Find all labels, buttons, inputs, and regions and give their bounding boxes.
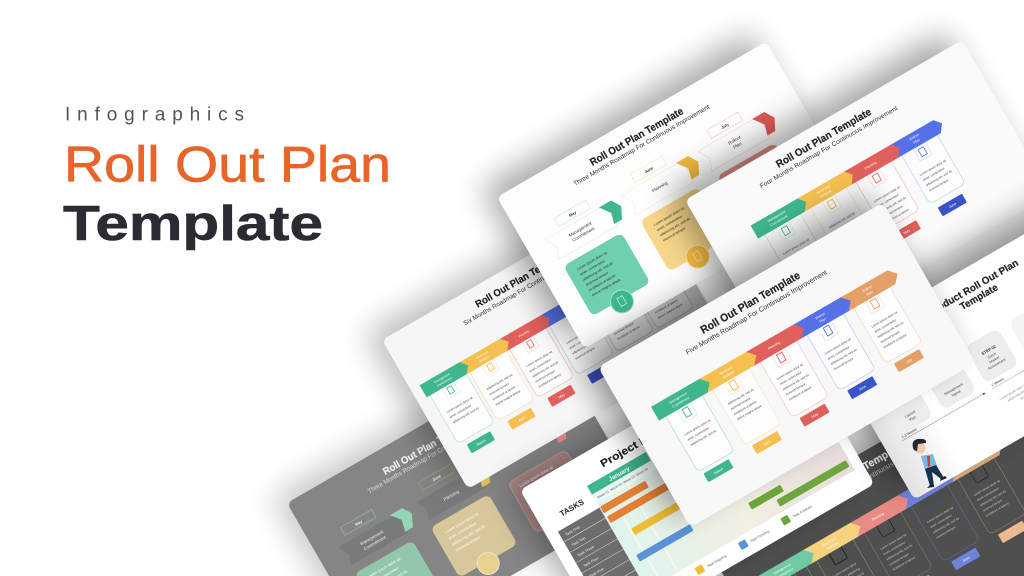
column: May: eiusmod tempor: [534, 369, 556, 384]
column: April: dolore magna aliqua: [495, 389, 521, 407]
column: May: [538, 186, 668, 329]
column: July: July: [720, 121, 730, 130]
column: June: [899, 130, 974, 219]
column: May dark: [861, 506, 940, 576]
header band: five-month slide: Plan: [819, 317, 827, 324]
header band: six-month slide: Planning: [518, 329, 530, 338]
subheading: six-month slide: Six Months Roadmap For Continuous Improvement: [462, 249, 591, 327]
column: April: April: [518, 416, 526, 423]
header band: five-month slide: Planning: [767, 341, 781, 351]
column: June dark: eiusmod tempor: [935, 525, 957, 540]
heading: four-month slide: Roll Out Plan Template: [774, 106, 874, 171]
header band: five-month slide: Analysis: [722, 370, 735, 380]
header band: four-month slide: Rollout: [909, 133, 920, 141]
column: June: Planning: [651, 180, 669, 193]
column: July: [691, 98, 815, 229]
panel: dark three-month slide: [287, 348, 643, 576]
column: June: adipiscing elit, sed do: [571, 337, 599, 355]
column: May: amet, consectetur: [876, 193, 899, 209]
column: June: eiusmod tempor: [833, 357, 854, 371]
column: July: Lorem ipsum dolor sit: [871, 310, 898, 329]
heading: five-month slide: Roll Out Plan Template: [699, 270, 802, 337]
legend: [694, 502, 813, 575]
subheading: three-month slide: Three Months Roadmap For Continuous Improvement: [572, 104, 711, 188]
column: May: Commitment: [363, 534, 387, 551]
column: March dark: [766, 561, 838, 576]
column: June: amet, consectetur: [827, 345, 850, 361]
column: May: incididunt ut labore: [885, 208, 910, 224]
column: May dark: Lorem ipsum dolor sit: [880, 533, 907, 551]
column: May: amet, consectetur: [779, 370, 802, 386]
column: May: May: [811, 412, 819, 419]
header band: five-month slide: Rollout: [815, 312, 826, 320]
column: April: incididunt ut labore: [733, 400, 758, 416]
column: July: [586, 277, 654, 352]
column: June: amet, consectetur: [447, 520, 478, 541]
column: July: incididunt ut labore: [616, 324, 641, 341]
column: April: dolore magna aliqua: [736, 404, 762, 421]
column: July: adipiscing elit, sed do: [877, 321, 904, 339]
column: May: Commitment: [571, 226, 596, 243]
column: April: eiusmod tempor: [730, 396, 751, 411]
column: June: eiusmod tempor: [574, 346, 596, 361]
column: April: adipiscing elit, sed do: [727, 387, 755, 406]
column: June: June: [858, 384, 867, 392]
column: July dark: adipiscing elit, sed do: [979, 489, 1007, 507]
subheading: five-month slide: Five Months Roadmap For Continuous Improvement: [685, 269, 829, 356]
column: June: Lorem ipsum dolor sit: [824, 337, 852, 356]
heading: dark three-month slide: Roll Out Plan Template: [381, 416, 477, 478]
heading: project roadmap: Project Roadmap: [598, 410, 691, 470]
timeline: 2 Weeks: [991, 377, 1005, 387]
column: May dark: incididunt ut labore: [892, 555, 916, 572]
header band: six-month slide: Commitment: [436, 376, 453, 388]
column: June: June: [643, 165, 655, 174]
column: June: [547, 300, 622, 388]
column: April: incididunt ut labore: [834, 223, 859, 240]
title: Roll Out Plan: Roll Out Plan: [64, 136, 391, 192]
timeline: 2-3 Weeks: [901, 427, 918, 439]
column: July dark: eiusmod tempor: [982, 498, 1003, 513]
column: April: adipiscing elit, sed do: [486, 373, 514, 391]
column: March: March: [713, 467, 724, 475]
column: March: Lorem ipsum dolor sit: [782, 238, 810, 256]
column: May: amet, consectetur: [528, 357, 552, 373]
task list panel: Task One: [565, 525, 581, 537]
heading: three-month slide: Roll Out Plan Template: [588, 105, 686, 169]
header band: dark five-month slide: [755, 438, 1006, 576]
header band: six-month slide: [420, 289, 593, 397]
column: April: April: [763, 439, 771, 447]
column: June: eiusmod tempor: [662, 226, 687, 243]
column: July: Lorem ipsum dolor sit: [518, 464, 555, 488]
column: July dark: amet, consectetur: [976, 486, 999, 502]
column: May: May: [558, 393, 566, 400]
step tiles: STEP 02: [980, 343, 997, 356]
legend: Task Finished: [792, 505, 813, 519]
gantt bars: [600, 389, 849, 576]
column: March: amet, consectetur: [449, 403, 472, 419]
column: June: Lorem ipsum dolor sit: [653, 206, 685, 227]
column: May: May: [354, 518, 364, 527]
heading: product roll out: Product Roll Out Plan: [927, 258, 1021, 318]
panel: three-month slide: [497, 42, 854, 349]
column: June: eiusmod tempor: [454, 534, 482, 553]
column: July: eiusmod tempor: [880, 330, 901, 344]
column: May: dolore magna aliqua: [591, 278, 621, 297]
column: March: Lorem ipsum dolor sit: [684, 418, 711, 437]
header band: six-month slide: Analysis: [478, 354, 490, 363]
column: March: March: [476, 438, 486, 447]
column: June dark: June: [962, 556, 970, 563]
panel: dark five-month slide: [705, 343, 1024, 576]
step tiles: Plan: [909, 415, 917, 422]
column: May: Management: [568, 220, 593, 238]
column: June dark: [908, 479, 986, 574]
column: June: adipiscing elit, sed do: [925, 169, 953, 187]
column: August: incididunt ut labore: [654, 298, 679, 315]
subheading: dark five-month slide: Five Months Roadmap For Continuous Improvement: [788, 440, 932, 527]
column: August: [626, 254, 694, 329]
column: May dark: eiusmod tempor: [889, 552, 910, 567]
timeline: [899, 346, 1024, 442]
column: April: adipiscing elit, sed do: [828, 211, 856, 229]
header band: four-month slide: Planning: [864, 160, 877, 171]
header band: dark five-month slide: Analysis: [826, 541, 839, 551]
column: April: eiusmod tempor: [489, 382, 510, 396]
column: August: eiusmod tempor: [651, 295, 672, 309]
step tiles: Market: [989, 355, 1000, 364]
column: March: adipiscing elit, sed do: [690, 429, 717, 447]
week labels: Week 01: [596, 489, 610, 500]
column: March: [662, 390, 741, 484]
column: May: Management: [359, 529, 385, 546]
header band: six-month slide: Need and: [475, 350, 489, 360]
column: May: [757, 335, 836, 430]
header band: dark five-month slide: Planning: [871, 512, 885, 522]
column: June: Lorem ipsum dolor sit: [444, 511, 480, 535]
task list panel: Task Two: [571, 536, 586, 547]
column: May dark: adipiscing elit, sed do: [886, 543, 913, 561]
column: May: adipiscing elit, sed do: [531, 360, 559, 378]
column: March: March: [811, 280, 822, 288]
column: May: Lorem ipsum dolor sit: [525, 350, 553, 368]
column: May: May: [568, 209, 578, 218]
task list panel: Task Three: [577, 545, 595, 558]
step tiles: Assessment: [987, 358, 1006, 371]
column: June: adipiscing elit, sed do: [659, 217, 691, 237]
step tiles: Signal: [951, 389, 962, 398]
column: July: [850, 281, 929, 376]
column: March: adipiscing elit, sed do: [452, 406, 480, 424]
column: March: amet, consectetur: [687, 426, 710, 442]
column: July: July: [905, 358, 913, 364]
column: March: adipiscing elit, sed do: [788, 248, 816, 266]
header band: four-month slide: Analysis: [819, 189, 832, 199]
column: June dark: amet, consectetur: [929, 513, 953, 529]
column: May: Lorem ipsum dolor sit: [576, 251, 608, 271]
column: May: eiusmod tempor: [882, 204, 903, 219]
column: June: [408, 449, 535, 576]
column: June: June: [948, 202, 957, 209]
column: May: May: [903, 228, 911, 235]
panel: four-month slide: [685, 40, 1024, 354]
column: July: Lorem ipsum dolor sit: [730, 162, 762, 182]
column: June dark: adipiscing elit, sed do: [932, 516, 960, 534]
column: April: [808, 182, 883, 271]
column: June: amet, consectetur: [656, 214, 684, 232]
week labels: Week 02: [609, 482, 623, 492]
header band: four-month slide: Plan: [913, 138, 921, 145]
heading: six-month slide: Roll Out Plan Template: [474, 249, 570, 310]
subheading: dark three-month slide: Three Months Roadmap For Continuous Improvement: [367, 414, 500, 495]
header band: five-month slide: Rollout: [861, 285, 873, 293]
step tiles: Quick: [987, 351, 997, 360]
column: April: incididunt ut labore: [492, 385, 516, 401]
column: March: Lorem ipsum dolor sit: [446, 396, 474, 414]
panel: six-month slide: [382, 190, 728, 489]
header band: dark five-month slide: Management: [773, 562, 792, 576]
header band: five-month slide: Need and: [719, 365, 733, 376]
heading line two: product roll out: Template: [958, 282, 1001, 313]
column: June: Lorem ipsum dolor sit: [565, 327, 593, 345]
column: May: adipiscing elit, sed do: [879, 195, 907, 214]
label: Infographics: Infographics: [65, 104, 244, 126]
column: May: eiusmod tempor: [585, 270, 610, 287]
panel: project roadmap slide: [520, 335, 874, 576]
column: March: [427, 369, 502, 457]
column: July dark: incididunt ut labore: [985, 501, 1010, 518]
column: May: amet, consectetur: [579, 258, 607, 277]
mock slide collage: [272, 32, 1024, 576]
header band: six-month slide: Management: [433, 372, 451, 384]
step tiles: Management: [943, 382, 964, 396]
column: July: incididunt ut labore: [883, 333, 907, 349]
header band: four-month slide: Management: [767, 210, 786, 223]
label: tasks: TASKS: [558, 497, 586, 518]
column: May: Lorem ipsum dolor sit: [873, 185, 901, 203]
header band: dark five-month slide: Need and: [823, 536, 837, 547]
column: May: eiusmod tempor: [785, 382, 806, 396]
column: April: eiusmod tempor: [831, 220, 852, 235]
column: April dark: [813, 534, 892, 576]
panel: five-month slide: [598, 202, 975, 527]
column: May: adipiscing elit, sed do: [582, 261, 614, 282]
legend: Task Ongoing: [706, 554, 727, 568]
column: May: Lorem ipsum dolor sit: [776, 363, 804, 381]
heading: dark five-month slide: Roll Out Plan Template: [802, 440, 906, 507]
header band: five-month slide: Plan: [866, 290, 874, 297]
header band: five-month slide: Commitment: [671, 396, 690, 409]
column: April: [467, 346, 542, 434]
column: June dark: Lorem ipsum dolor sit: [926, 506, 954, 524]
header: January: [587, 452, 651, 495]
column: June: June: [431, 473, 442, 482]
task list panel: [558, 508, 658, 576]
column: June: amet, consectetur: [568, 334, 592, 350]
column: June: eiusmod tempor: [928, 178, 949, 192]
task list panel: Task Four: [583, 556, 600, 568]
header band: five-month slide: [651, 267, 902, 421]
column: June: adipiscing elit, sed do: [830, 348, 858, 366]
column: May: incididunt ut labore: [537, 372, 562, 389]
column: July dark: [954, 452, 1024, 547]
column: May: adipiscing elit, sed do: [782, 373, 810, 391]
week labels: Week 04: [635, 467, 649, 477]
column: August: dolore magna aliqua: [657, 302, 684, 320]
title: Template: Template: [63, 197, 323, 251]
column: June: amet, consectetur: [922, 166, 945, 182]
column: May: incididunt ut labore: [788, 385, 813, 402]
column: March: [762, 209, 837, 298]
column: May: [507, 323, 582, 411]
column: June: [804, 308, 882, 403]
column: April: April: [858, 254, 867, 261]
column: July: [492, 417, 605, 533]
column: July: Rollout: [727, 134, 742, 146]
column: July dark: Lorem ipsum dolor sit: [973, 479, 1001, 497]
column: May: [853, 156, 928, 245]
column: April: [709, 363, 788, 457]
week labels: Week 03: [622, 474, 636, 485]
column: June: Planning: [443, 489, 460, 502]
icon: standing man: [913, 439, 947, 488]
header: January: January: [608, 466, 632, 483]
column: May: incididunt ut labore: [588, 274, 616, 292]
column: July: Plan: [732, 141, 743, 150]
column: July: eiusmod tempor: [613, 321, 634, 336]
column: March: amet, consectetur: [785, 245, 809, 261]
column: June: adipiscing elit, sed do: [451, 523, 487, 547]
legend: Task Pending: [750, 529, 770, 543]
gantt chart grid: [592, 375, 855, 576]
step tiles: Launch: [904, 410, 916, 419]
week labels: [596, 467, 649, 500]
column: April: dolore magna aliqua: [837, 227, 864, 245]
subheading: four-month slide: Four Months Roadmap For Continuous Improvement: [759, 105, 899, 190]
column: May: [330, 493, 453, 576]
header band: four-month slide: Commitment: [770, 214, 788, 227]
header band: four-month slide: Need and: [816, 184, 831, 195]
column: June: [615, 142, 745, 284]
header band: five-month slide: Management: [669, 391, 688, 405]
column: July: amet, consectetur: [874, 318, 897, 334]
column: June: Lorem ipsum dolor sit: [919, 159, 947, 177]
step tiles: [878, 303, 1024, 435]
panel: product roll out slide: [827, 198, 1024, 500]
column: May dark: amet, consectetur: [883, 540, 906, 556]
header band: four-month slide: [751, 117, 946, 239]
